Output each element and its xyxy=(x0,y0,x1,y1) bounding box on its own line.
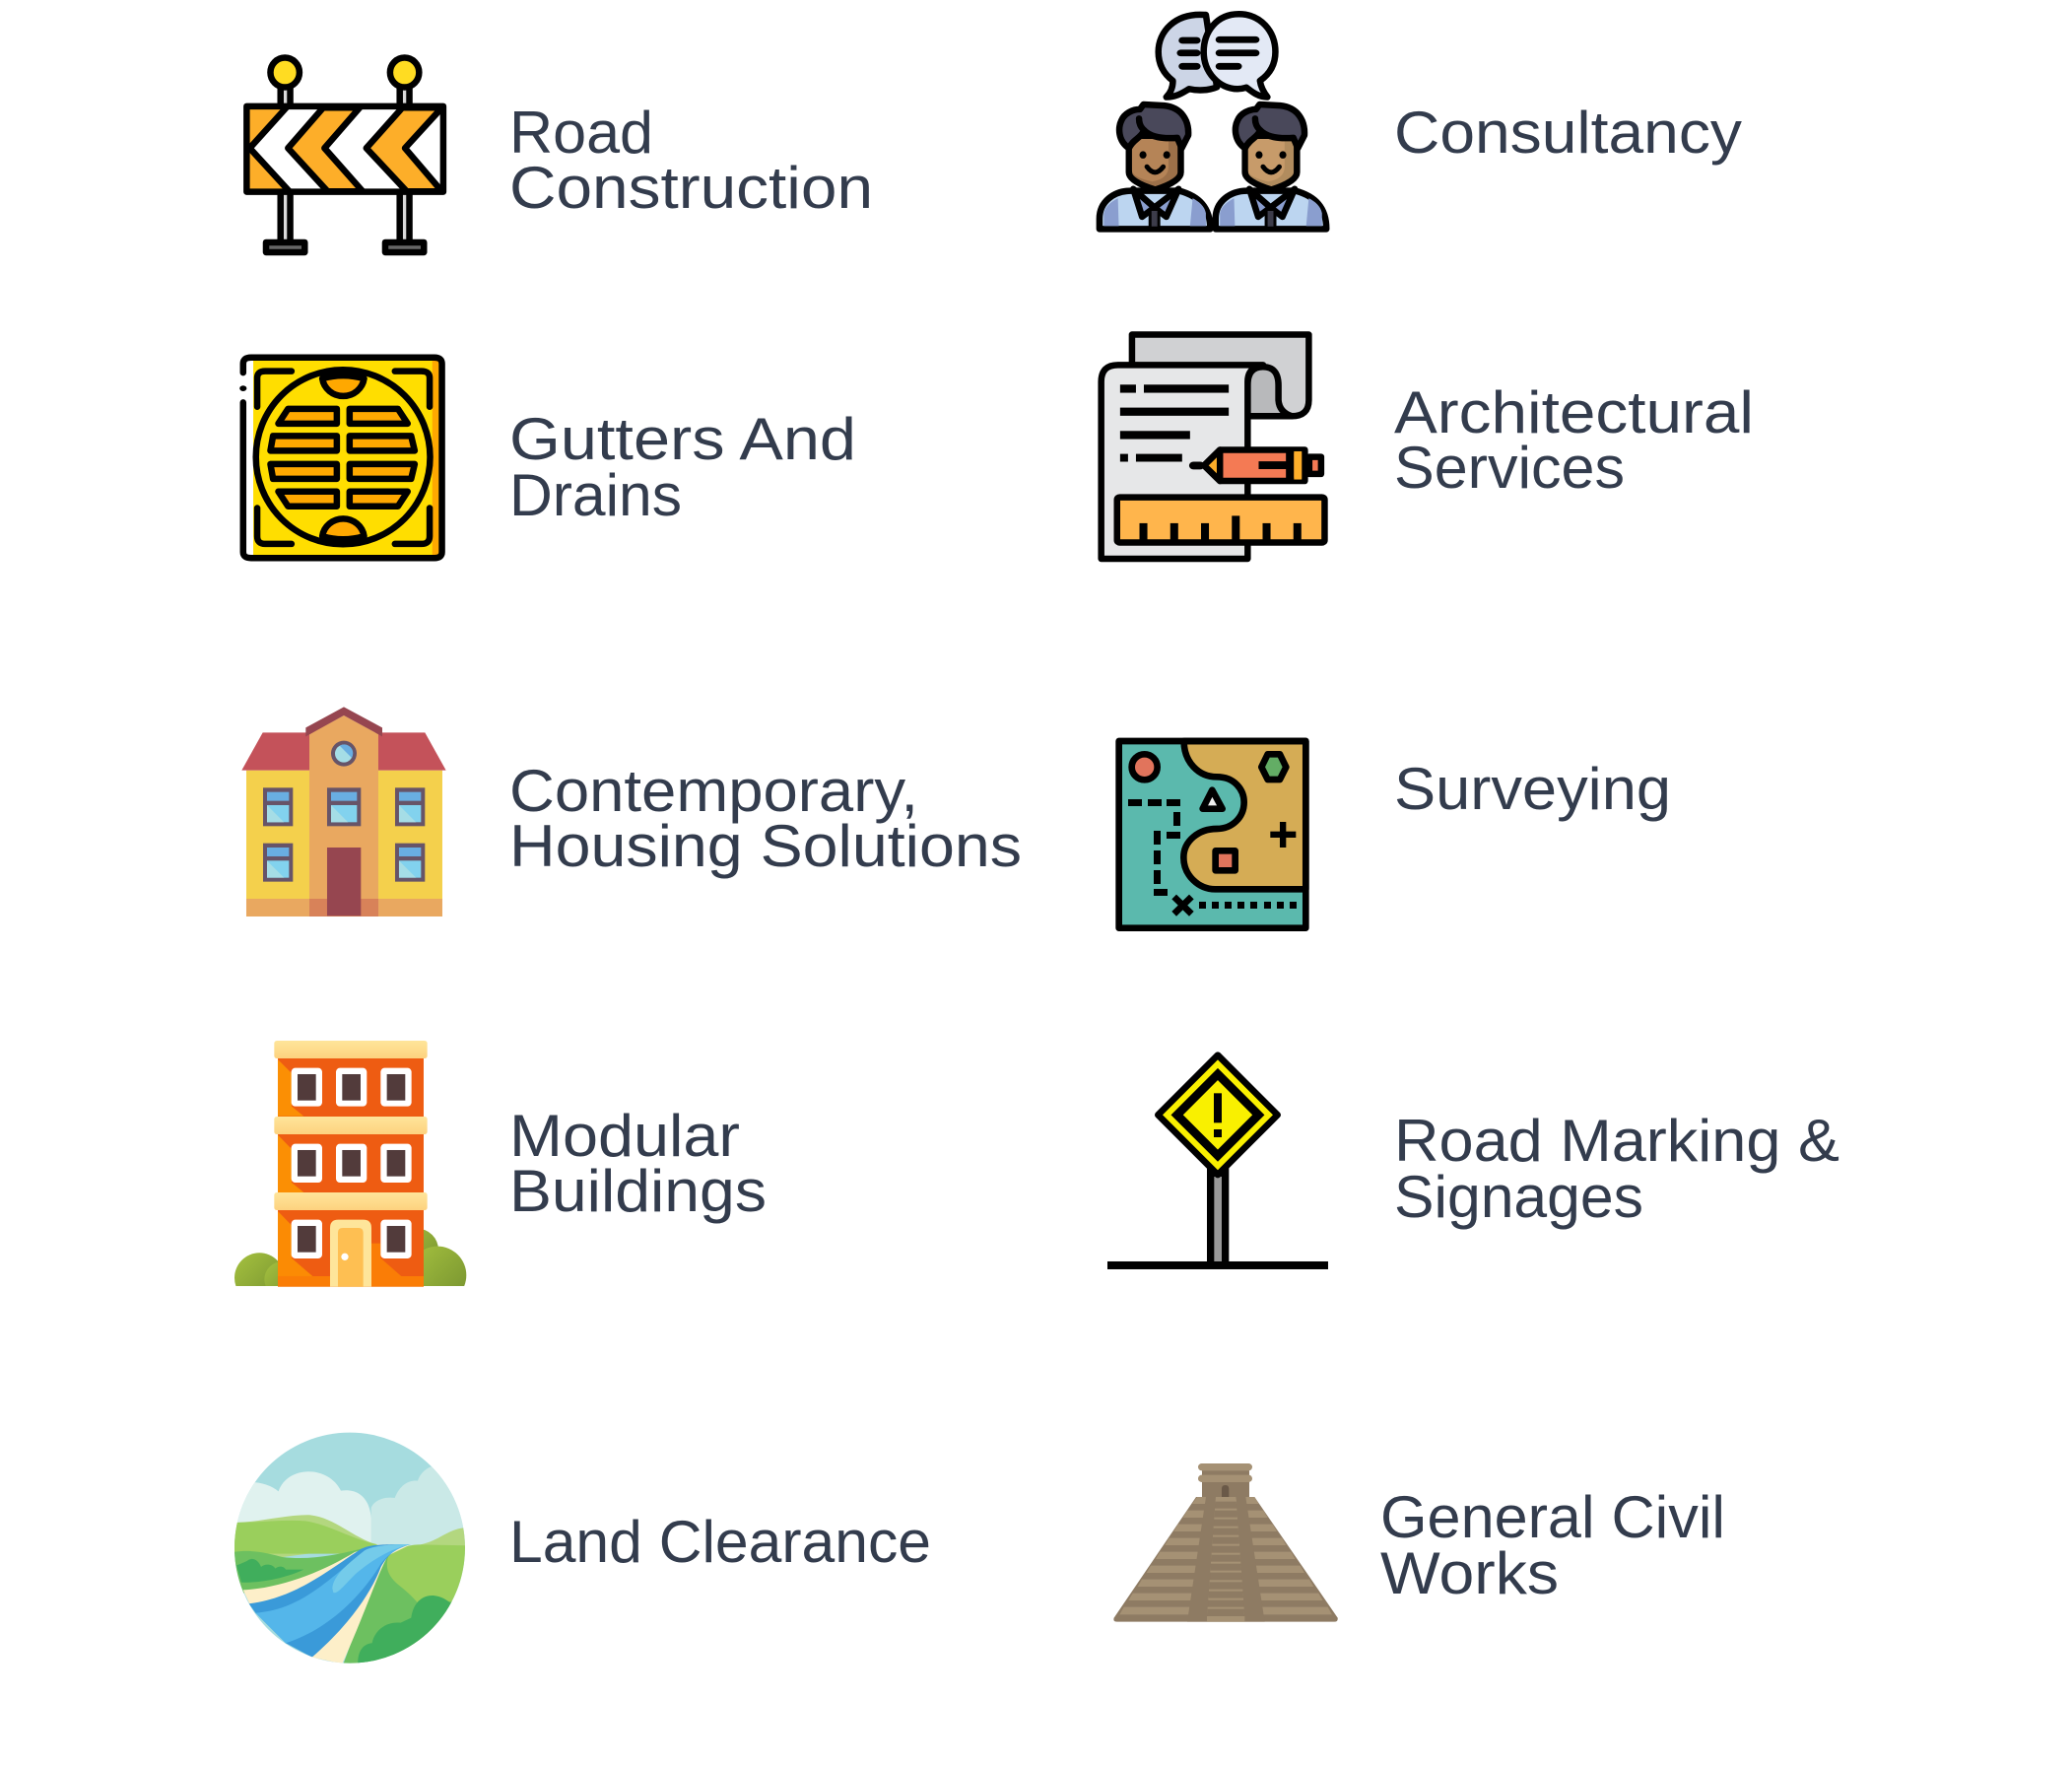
label: modular buildings: Modular xyxy=(509,1103,740,1169)
label: contemporary housing solutions xyxy=(509,758,1022,879)
panel: consultancy xyxy=(1100,14,1742,229)
label: gutters and drains: Gutters And xyxy=(509,406,856,472)
icon: two consultants with speech bubbles xyxy=(1100,14,1326,229)
icon: landscape xyxy=(230,1429,470,1668)
label: road marking and signages xyxy=(1394,1108,1839,1230)
icon: house xyxy=(241,707,446,917)
label: general civil works: General Civil xyxy=(1380,1484,1725,1550)
icon: blueprint, pen and ruler xyxy=(1102,335,1324,559)
panel: land clearance xyxy=(230,1429,931,1668)
panel: contemporary housing solutions xyxy=(241,707,1022,917)
panel: road marking and signages xyxy=(1107,1055,1839,1269)
label: general civil works xyxy=(1380,1484,1725,1606)
icon: stepped pyramid xyxy=(1113,1463,1338,1622)
icon: drain cover xyxy=(239,358,442,558)
label: architectural services xyxy=(1394,379,1754,501)
panel: modular buildings xyxy=(234,1041,767,1304)
label: contemporary housing solutions: Housing Solutions xyxy=(509,813,1022,879)
label: consultancy: Consultancy xyxy=(1394,100,1742,166)
icon: warning road sign xyxy=(1107,1055,1328,1269)
label: road construction: Road xyxy=(509,100,653,166)
label: general civil works: Works xyxy=(1380,1540,1559,1606)
label: modular buildings: Buildings xyxy=(509,1158,767,1224)
icon: apartment block xyxy=(234,1041,466,1304)
panel: architectural services xyxy=(1102,335,1754,559)
label: road marking and signages: Signages xyxy=(1394,1164,1643,1230)
label: land clearance: Land Clearance xyxy=(509,1509,931,1575)
label: modular buildings xyxy=(509,1103,767,1224)
panel: general civil works xyxy=(1113,1463,1725,1622)
panel: surveying xyxy=(1119,741,1671,928)
label: road marking and signages: Road Marking & xyxy=(1394,1108,1839,1174)
label: contemporary housing solutions: Contemporary, xyxy=(509,758,918,824)
icon: treasure map xyxy=(1119,741,1305,928)
icon: road barricade xyxy=(246,58,443,252)
panel: gutters and drains xyxy=(239,358,856,558)
label: gutters and drains xyxy=(509,406,856,528)
label: architectural services: Architectural xyxy=(1394,379,1754,445)
label: road construction xyxy=(509,100,873,221)
label: gutters and drains: Drains xyxy=(509,462,682,528)
label: surveying: Surveying xyxy=(1394,756,1671,822)
panel: road construction xyxy=(246,58,873,252)
label: road construction: Construction xyxy=(509,155,873,221)
label: architectural services: Services xyxy=(1394,435,1625,501)
